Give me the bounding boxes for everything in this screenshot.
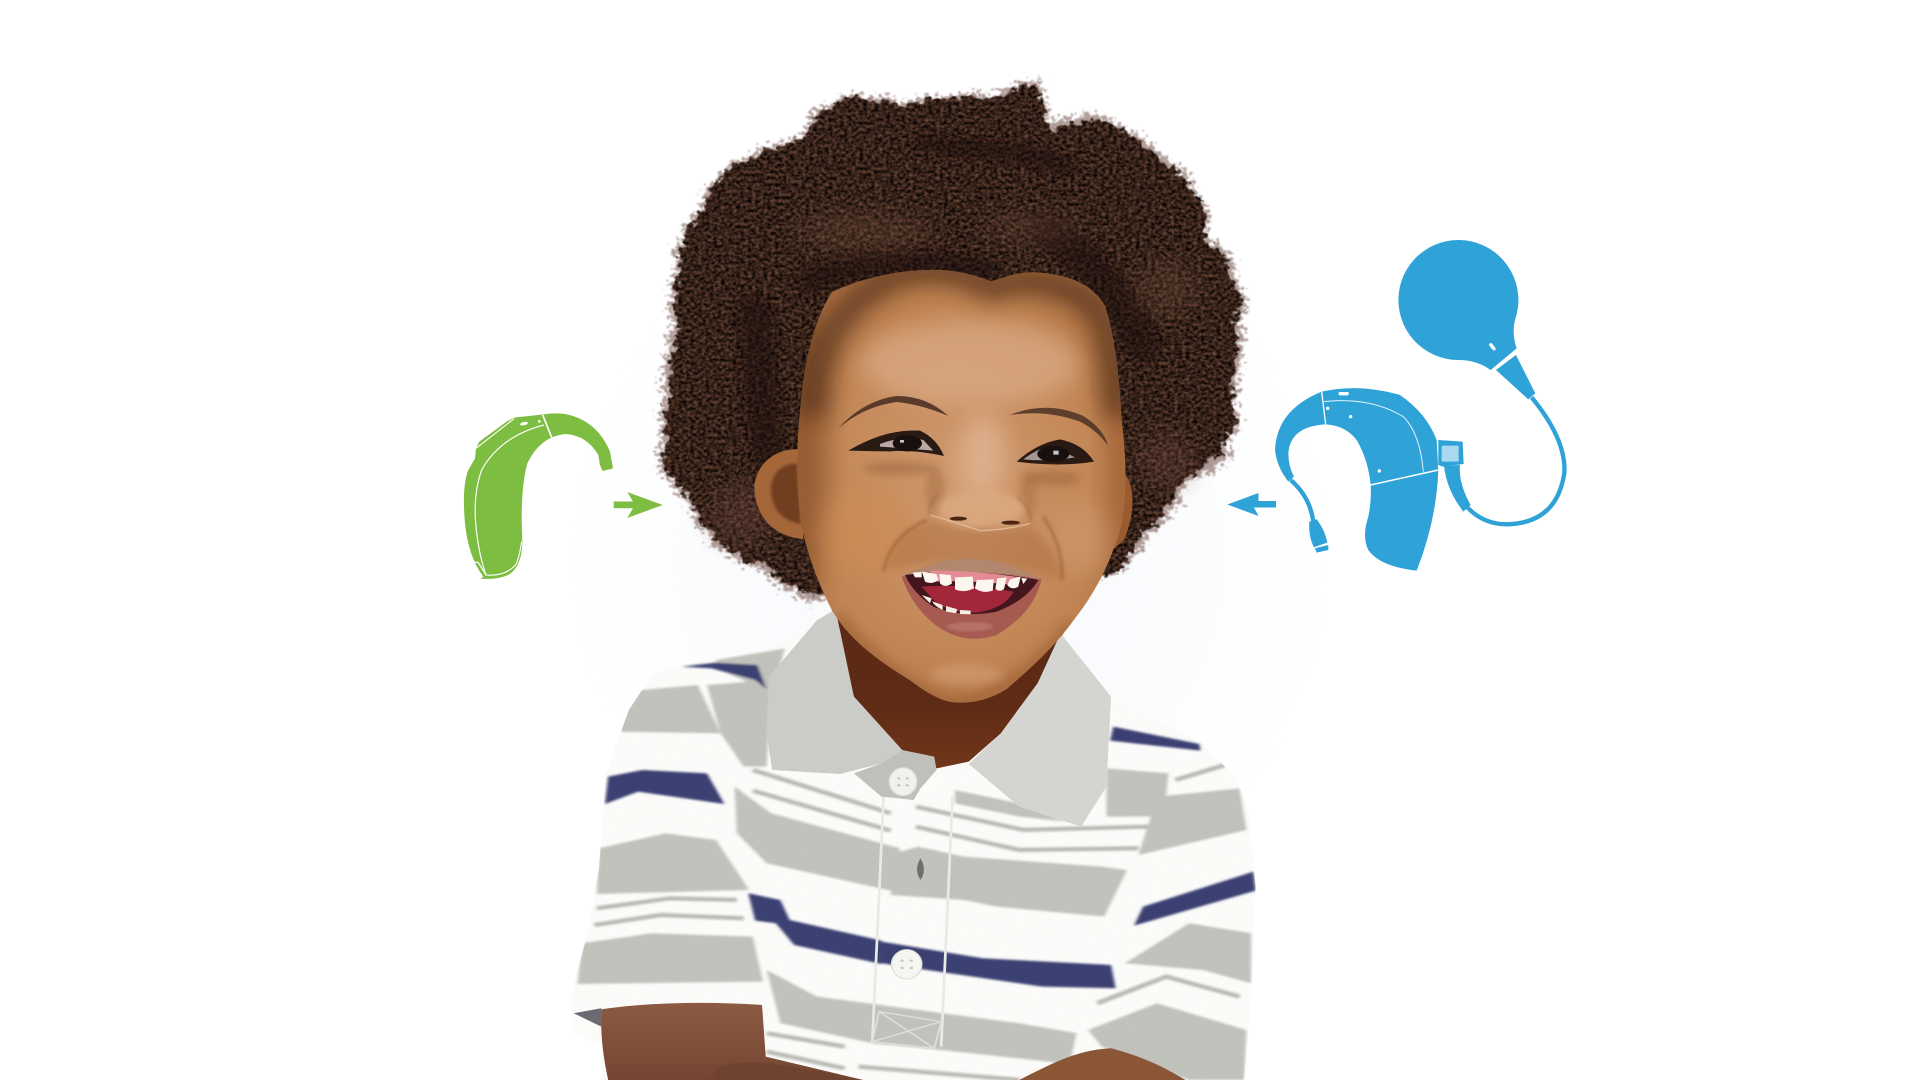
right cheek glow [1059, 508, 1112, 570]
cochlear implant icon (blue) [1275, 240, 1564, 571]
lower lip highlight [947, 622, 993, 631]
head [659, 80, 1243, 717]
lips [902, 558, 1042, 639]
tongue [922, 586, 1013, 613]
right collar [969, 633, 1111, 827]
cable [1467, 397, 1564, 524]
under-eye shadows [863, 462, 1080, 486]
nose bridge light [960, 414, 1005, 499]
hair mass [663, 85, 1239, 592]
ear tip cap [1315, 545, 1328, 553]
hearing aid detail lines [473, 415, 552, 575]
mouth interior [905, 572, 1038, 614]
laugh lines [883, 517, 1062, 580]
hairline inner shadow [811, 271, 1118, 417]
processor body [1275, 388, 1438, 571]
striped polo shirt and arms [560, 600, 1295, 1080]
left forearm [601, 1003, 863, 1080]
left collar [767, 609, 902, 774]
placket edges [872, 793, 953, 1047]
right forearm [1019, 1048, 1185, 1080]
connector window [1442, 446, 1459, 462]
placket top band [854, 750, 937, 800]
buttonhole [917, 858, 924, 880]
collar button [889, 768, 917, 796]
lower button [892, 950, 922, 979]
cable cone [1496, 355, 1535, 399]
neck [831, 607, 1065, 768]
right ear [1109, 471, 1132, 553]
left eyebrow [838, 396, 948, 428]
left ear [754, 449, 803, 539]
hair lower-left tint [709, 481, 775, 546]
processor button [1339, 392, 1349, 395]
forehead light [860, 321, 1081, 406]
upper lip area shade [887, 520, 1062, 580]
coil slot [1489, 342, 1496, 351]
right side shadow [1098, 390, 1126, 566]
mouth [902, 558, 1042, 639]
arrow: blue pointing to right ear [1227, 493, 1276, 516]
arrow: green pointing to left ear [614, 492, 663, 518]
hair right lower tint [1138, 431, 1195, 489]
ear hook [1291, 480, 1313, 522]
hair dark folds [754, 142, 1142, 460]
left side shadow [798, 319, 838, 590]
connector [1438, 440, 1464, 467]
left arm shading [712, 1063, 863, 1080]
hair fringe [659, 80, 1243, 596]
soft halo behind child [670, 280, 1230, 840]
processor dots [1326, 407, 1381, 473]
chin light [930, 663, 1003, 685]
face skin [798, 270, 1126, 703]
coil headpiece [1398, 240, 1518, 370]
upper lip [902, 558, 1042, 579]
cable strain relief [1444, 465, 1471, 512]
hearing aid body [464, 413, 613, 579]
placket lower box [872, 1012, 941, 1048]
right eyebrow [1010, 408, 1108, 446]
nose [929, 490, 1031, 531]
left eye [848, 430, 944, 456]
right eye [1017, 439, 1094, 464]
hearing aid icon (green) [464, 413, 613, 579]
gums [930, 571, 1020, 585]
shirt body [572, 624, 1256, 1080]
jaw shadow [836, 617, 1073, 703]
processor detail lines [1322, 386, 1438, 485]
lower teeth [922, 595, 971, 614]
photo: smiling child [560, 80, 1295, 1080]
shirt knit texture [572, 626, 1254, 1080]
left cheek glow [822, 501, 905, 550]
hair crown highlight [795, 210, 1199, 317]
nose side shade [926, 467, 1036, 517]
left sleeve underside [574, 1008, 601, 1027]
ear tip [1309, 519, 1327, 547]
upper teeth [913, 572, 1027, 592]
facial features [838, 396, 1108, 639]
